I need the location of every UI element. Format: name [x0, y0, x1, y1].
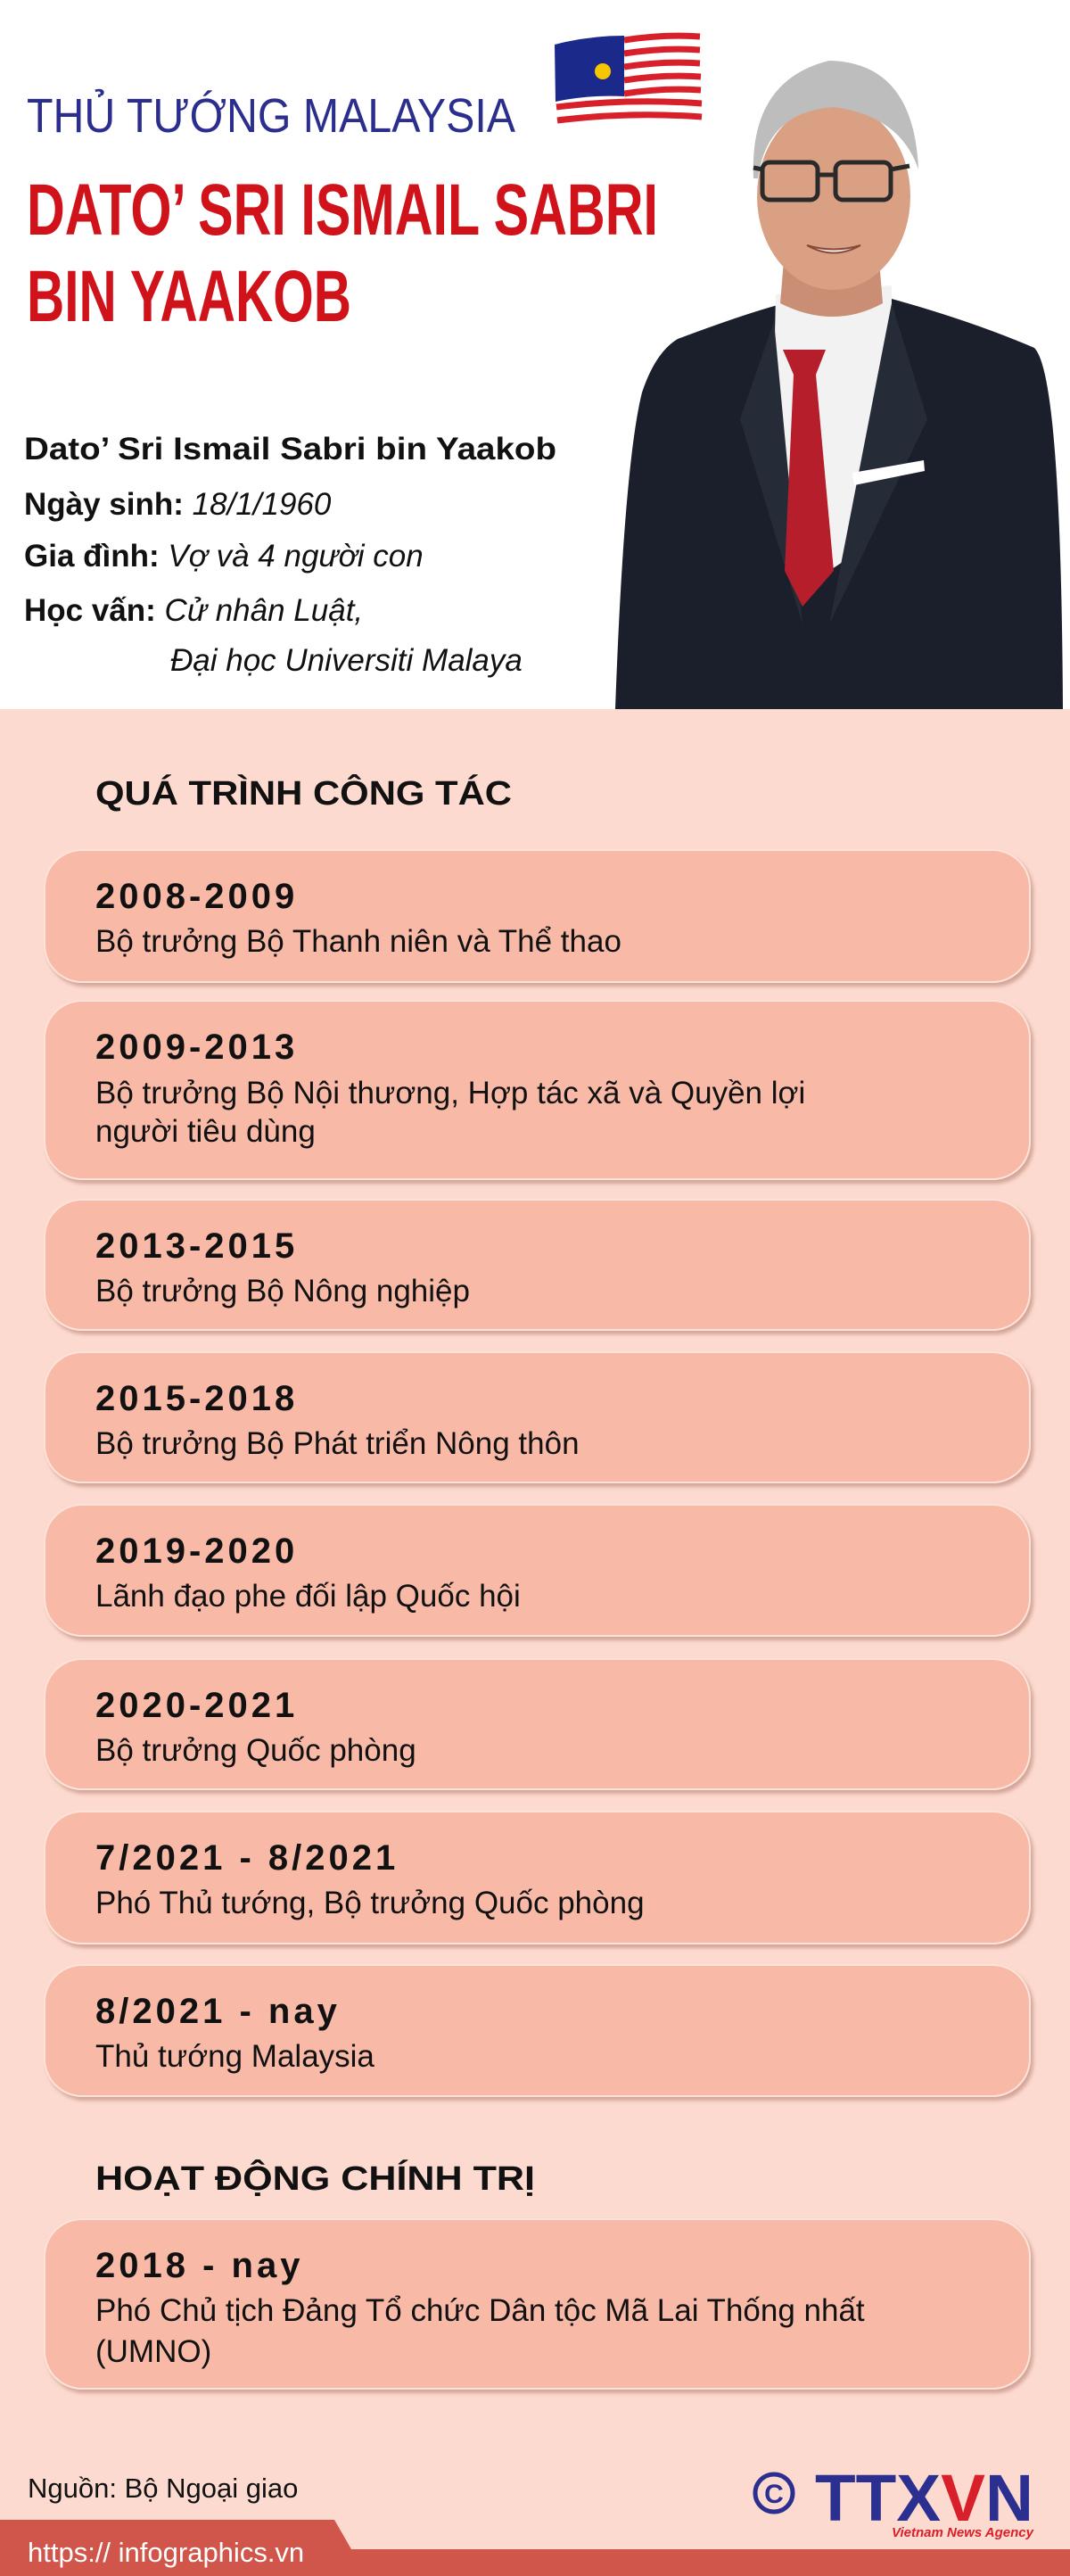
- footer band with url: [0, 2520, 1070, 2576]
- title: person name: BIN YAAKOB: [27, 256, 351, 337]
- card: 2009-2013: 2009-2013: [95, 1028, 298, 1067]
- card: 7/2021 - 8/2021: 7/2021 - 8/2021: [95, 1838, 399, 1878]
- card: 2019-2020: [45, 1505, 1030, 1636]
- card: 2019-2020: Lãnh đạo phe đối lập Quốc hội: [95, 1579, 521, 1614]
- info block: [24, 432, 556, 678]
- card: 2015-2018: [45, 1352, 1030, 1482]
- card: 2018 - nay: [45, 2219, 1030, 2389]
- heading: Hoạt động chính trị: HOẠT ĐỘNG CHÍNH TRỊ: [95, 2158, 535, 2198]
- card: 2020-2021: 2020-2021: [95, 1686, 298, 1725]
- logo: TTXVN: Vietnam News Agency: [892, 2525, 1034, 2540]
- info block: Gia đình: Vợ và 4 người con: [24, 539, 424, 574]
- title: person name: [27, 169, 658, 337]
- card: 2020-2021: Bộ trưởng Quốc phòng: [95, 1733, 416, 1768]
- logo: TTXVN: C: [764, 2480, 784, 2509]
- title: person name: DATO’ SRI ISMAIL SABRI: [27, 169, 658, 251]
- info block: Ngày sinh: 18/1/1960: [24, 487, 332, 522]
- pink background panel: [0, 709, 1070, 2576]
- card: 8/2021 - nay: [45, 1965, 1030, 2096]
- card: 8/2021 - nay: 8/2021 - nay: [95, 1992, 341, 2031]
- info block: Dato’ Sri Ismail Sabri bin Yaakob: [24, 432, 556, 466]
- card: 2020-2021: [45, 1659, 1030, 1789]
- card: 2008-2009: Bộ trưởng Bộ Thanh niên và Thể thao: [95, 924, 621, 959]
- info block: Học vấn: Cử nhân Luật,: [24, 593, 363, 628]
- title: Thủ tướng Malaysia: THỦ TƯỚNG MALAYSIA: [27, 89, 515, 143]
- card: 2018 - nay: Phó Chủ tịch Đảng Tổ chức Dân tộc Mã Lai Thống nhất: [95, 2293, 865, 2328]
- icon: Malaysia flag: [555, 35, 703, 132]
- card: 2018 - nay: 2018 - nay: [95, 2246, 303, 2285]
- card: 2019-2020: 2019-2020: [95, 1532, 298, 1571]
- card: 2008-2009: 2008-2009: [95, 877, 298, 916]
- heading: Quá trình công tác: QUÁ TRÌNH CÔNG TÁC: [95, 772, 512, 813]
- card: 2013-2015: 2013-2015: [95, 1226, 298, 1266]
- card: 8/2021 - nay: Thủ tướng Malaysia: [95, 2039, 374, 2074]
- logo: TTXVN: TTXVN: [815, 2461, 1033, 2535]
- card: 2009-2013: Bộ trưởng Bộ Nội thương, Hợp tác xã và Quyền lợi: [95, 1076, 805, 1110]
- card: 2008-2009: [45, 850, 1030, 982]
- card: 2015-2018: Bộ trưởng Bộ Phát triển Nông thôn: [95, 1426, 580, 1461]
- card: 7/2021 - 8/2021: Phó Thủ tướng, Bộ trưởng Quốc phòng: [95, 1886, 645, 1920]
- card: 2018 - nay: (UMNO): [95, 2334, 211, 2369]
- card: 7/2021 - 8/2021: [45, 1812, 1030, 1944]
- source text: Nguồn: Bộ Ngoại giao: [28, 2473, 298, 2504]
- card: 2015-2018: 2015-2018: [95, 1379, 298, 1418]
- footer band with url: https:// infographics.vn: [28, 2537, 304, 2568]
- info block: Đại học Universiti Malaya: [170, 643, 523, 678]
- portrait photo: [615, 61, 1063, 709]
- card: 2009-2013: người tiêu dùng: [95, 1114, 316, 1149]
- card: 2013-2015: Bộ trưởng Bộ Nông nghiệp: [95, 1274, 470, 1309]
- card: 2009-2013: [45, 1001, 1030, 1179]
- card: 2013-2015: [45, 1200, 1030, 1330]
